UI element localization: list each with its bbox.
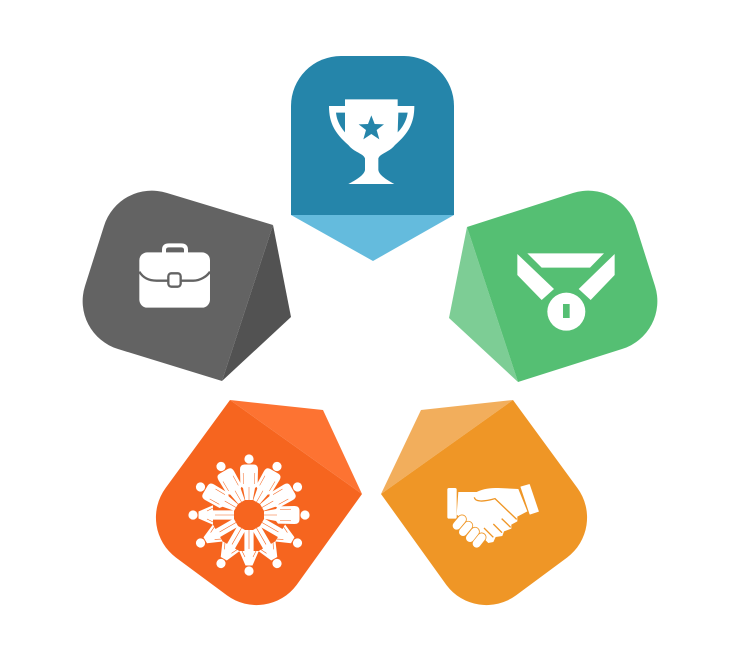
face: green xyxy=(467,191,657,382)
panel: right green badge xyxy=(449,191,657,382)
panel: top blue badge xyxy=(291,56,454,261)
fold: green light xyxy=(449,227,518,382)
icon: circle of people xyxy=(188,454,310,576)
panel: bottom-right amber badge xyxy=(381,400,587,605)
panel: bottom-left orange badge xyxy=(156,400,362,605)
icon: handshake xyxy=(447,485,538,544)
face: orange xyxy=(156,400,362,605)
icon: medal xyxy=(517,253,615,331)
panel: left gray badge xyxy=(83,191,291,381)
fold: top light blue xyxy=(291,215,454,261)
fold: amber light xyxy=(381,400,513,494)
icon: trophy xyxy=(329,99,414,184)
fold: orange light xyxy=(230,400,362,494)
face: amber xyxy=(381,400,587,605)
face: gray xyxy=(83,191,273,381)
icon: briefcase xyxy=(139,245,210,308)
face: top blue xyxy=(291,56,454,215)
fold: gray dark xyxy=(222,225,291,381)
